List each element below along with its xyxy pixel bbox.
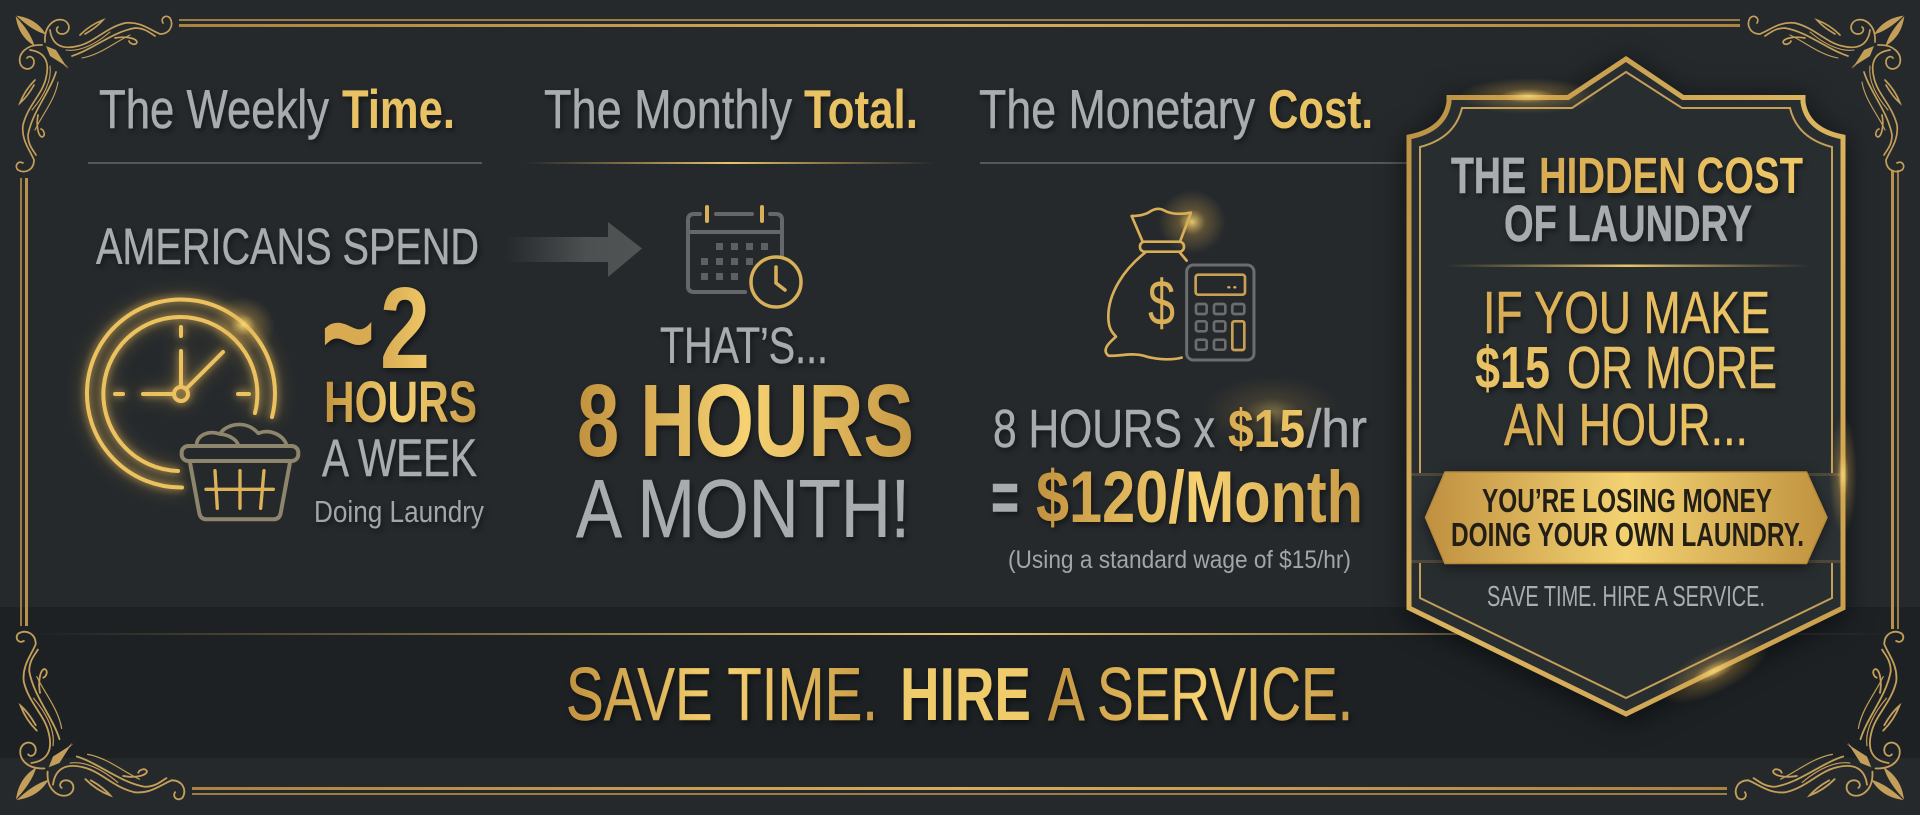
- corner ornament: top left: [16, 16, 172, 172]
- text: if you make $15 or more an hour: [1475, 280, 1777, 458]
- banner: [1426, 472, 1827, 564]
- footer call to action: SAVE TIME.: [566, 652, 878, 736]
- icon: calendar with clock: [688, 207, 801, 307]
- panel: monthly total: [525, 78, 935, 555]
- corner ornament: top right: [1748, 16, 1904, 172]
- stat: about 2 hours a week doing laundry: 2: [380, 263, 430, 393]
- footer call to action: HIRE: [900, 652, 1031, 736]
- result: $120 per month: =: [991, 457, 1019, 538]
- shield title: HIDDEN COST: [1539, 147, 1803, 204]
- stat: about 2 hours a week doing laundry: A WEEK: [322, 429, 477, 488]
- footer call to action: A SERVICE.: [1048, 652, 1353, 736]
- heading: the monthly total: Total.: [804, 78, 918, 140]
- stat: about 2 hours a week doing laundry: Doing Laundry: [314, 494, 484, 529]
- icon: money bag with calculator: [1106, 209, 1254, 360]
- heading: the weekly time: Time.: [342, 78, 455, 140]
- calculation: 8 hours x $15 per hour: /hr: [1307, 399, 1367, 459]
- stat: about 2 hours a week doing laundry: [314, 263, 484, 529]
- heading: the monetary cost: Cost.: [1268, 78, 1373, 140]
- icon: laundry basket: [182, 424, 298, 519]
- panel: monetary cost: [979, 78, 1407, 574]
- corner ornament: bottom left: [17, 632, 184, 799]
- calculation: 8 hours x $15 per hour: 8 HOURS x: [993, 399, 1215, 459]
- heading: the weekly time: The Weekly: [99, 78, 329, 140]
- heading: the monthly total: The Monthly: [544, 78, 792, 140]
- stat: about 2 hours a week doing laundry: ~: [323, 269, 373, 397]
- calculation: 8 hours x $15 per hour: $15: [1228, 399, 1305, 459]
- footer call to action: [566, 652, 1353, 736]
- text: if you make $15 or more an hour: OR MORE: [1567, 335, 1777, 401]
- footnote: (Using a standard wage of $15/hr): [1008, 546, 1351, 574]
- shield title: [1451, 147, 1803, 252]
- stat: that's 8 hours a month: [576, 317, 914, 555]
- shield frame: [1409, 59, 1857, 717]
- text: if you make $15 or more an hour: AN HOUR...: [1504, 392, 1748, 458]
- panel: weekly time: [87, 78, 484, 529]
- stat: that's 8 hours a month: A MONTH!: [576, 462, 910, 555]
- shield title: THE: [1451, 147, 1526, 204]
- result: $120 per month: $120/Month: [1036, 457, 1363, 538]
- stat: that's 8 hours a month: THAT’S...: [660, 317, 828, 374]
- corner ornament: bottom right: [1736, 632, 1903, 799]
- text: if you make $15 or more an hour: $15: [1475, 335, 1550, 401]
- arrow: [505, 222, 642, 277]
- stat: about 2 hours a week doing laundry: HOURS: [324, 370, 477, 435]
- footer band: [0, 607, 1920, 758]
- panel: hidden cost shield: [1409, 59, 1857, 717]
- text: if you make $15 or more an hour: IF YOU MAKE: [1483, 280, 1770, 346]
- heading: the monetary cost: The Monetary: [979, 78, 1255, 140]
- icon: dollar sign: $: [1148, 267, 1175, 339]
- shield tagline: SAVE TIME. HIRE A SERVICE.: [1487, 581, 1765, 613]
- stat: that's 8 hours a month: 8 HOURS: [577, 363, 914, 478]
- shield title: OF LAUNDRY: [1504, 195, 1752, 252]
- icon: clock: [87, 300, 275, 488]
- banner: YOU’RE LOSING MONEY: [1482, 482, 1772, 519]
- banner: DOING YOUR OWN LAUNDRY.: [1451, 516, 1804, 553]
- text: americans spend: AMERICANS SPEND: [96, 218, 479, 275]
